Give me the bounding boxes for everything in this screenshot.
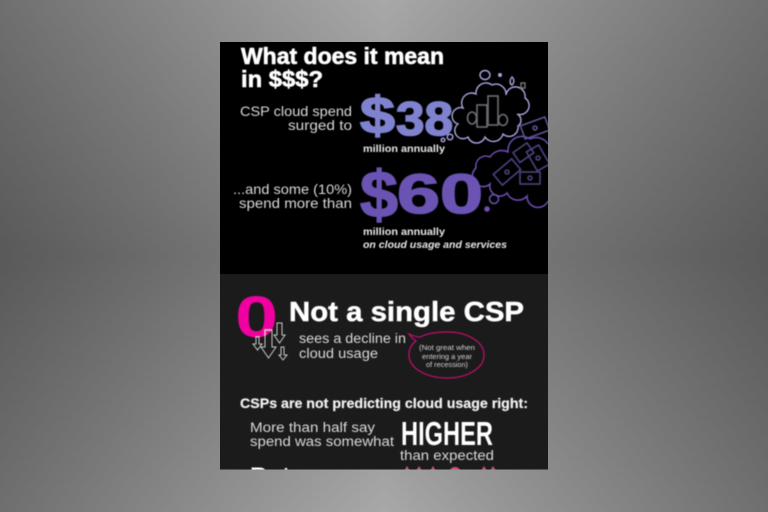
stat: $38 (359, 92, 454, 139)
title (241, 43, 444, 92)
panel: dark grey cloud usage section (220, 274, 548, 470)
text: million annually on cloud usage and services: million annually (363, 226, 445, 238)
text: more than half say spend was somewhat (250, 420, 394, 449)
text: million annually: million annually (363, 143, 445, 155)
text: CSP cloud spend surged to: CSP cloud spend (240, 103, 352, 119)
text: clipped white word: But (250, 463, 290, 490)
stat: $38: 38 (396, 92, 453, 145)
title: What does it mean (241, 43, 444, 69)
icon: clipped red arrows (404, 466, 496, 470)
infographic panel (220, 42, 550, 490)
text: CSP cloud spend surged to: surged to (288, 117, 352, 133)
stat: $60: $ (360, 157, 398, 231)
text: sees a decline in cloud usage: cloud usage (299, 346, 378, 361)
text: sees a decline in cloud usage (299, 331, 406, 361)
icon: thought cloud with banknotes (472, 117, 550, 211)
callout: not great when entering a year of recession: entering a year (422, 354, 473, 361)
stat: $60 (359, 166, 482, 224)
stat: $38: $ (360, 87, 395, 145)
text: million annually on cloud usage and services: on cloud usage and services (363, 239, 507, 251)
panel: black dollars section (220, 42, 548, 274)
panel contents (233, 43, 550, 490)
text: and some 10 percent spend more than (233, 181, 352, 211)
title: in $$$? (241, 66, 323, 92)
stat: pink zero: 0 (235, 285, 278, 350)
callout: not great when entering a year of recession: of recession) (426, 362, 468, 369)
text: and some 10 percent spend more than: spend more than (239, 195, 352, 211)
text: more than half say spend was somewhat: More than half say (250, 420, 375, 435)
stat: $60: 60 (397, 162, 483, 225)
text: sees a decline in cloud usage: sees a decline in (299, 331, 406, 346)
heading: Not a single CSP: Not a single CSP (289, 296, 524, 327)
icon: down arrows (253, 323, 287, 360)
callout: not great when entering a year of recession (409, 332, 484, 378)
callout: not great when entering a year of recession: (Not great when (419, 345, 475, 352)
heading: CSPs are not predicting cloud usage right: CSPs are not predicting cloud usage right: (240, 395, 528, 411)
stat: HIGHER: HIGHER (401, 415, 493, 452)
icon: thought cloud with coin stacks (441, 70, 529, 143)
text: million annually on cloud usage and services (363, 226, 507, 251)
text: and some 10 percent spend more than: ...and some (10%) (233, 181, 352, 197)
text: more than half say spend was somewhat: spend was somewhat (250, 434, 394, 449)
text: than expected: than expected (400, 447, 494, 463)
text: CSP cloud spend surged to (240, 103, 352, 133)
